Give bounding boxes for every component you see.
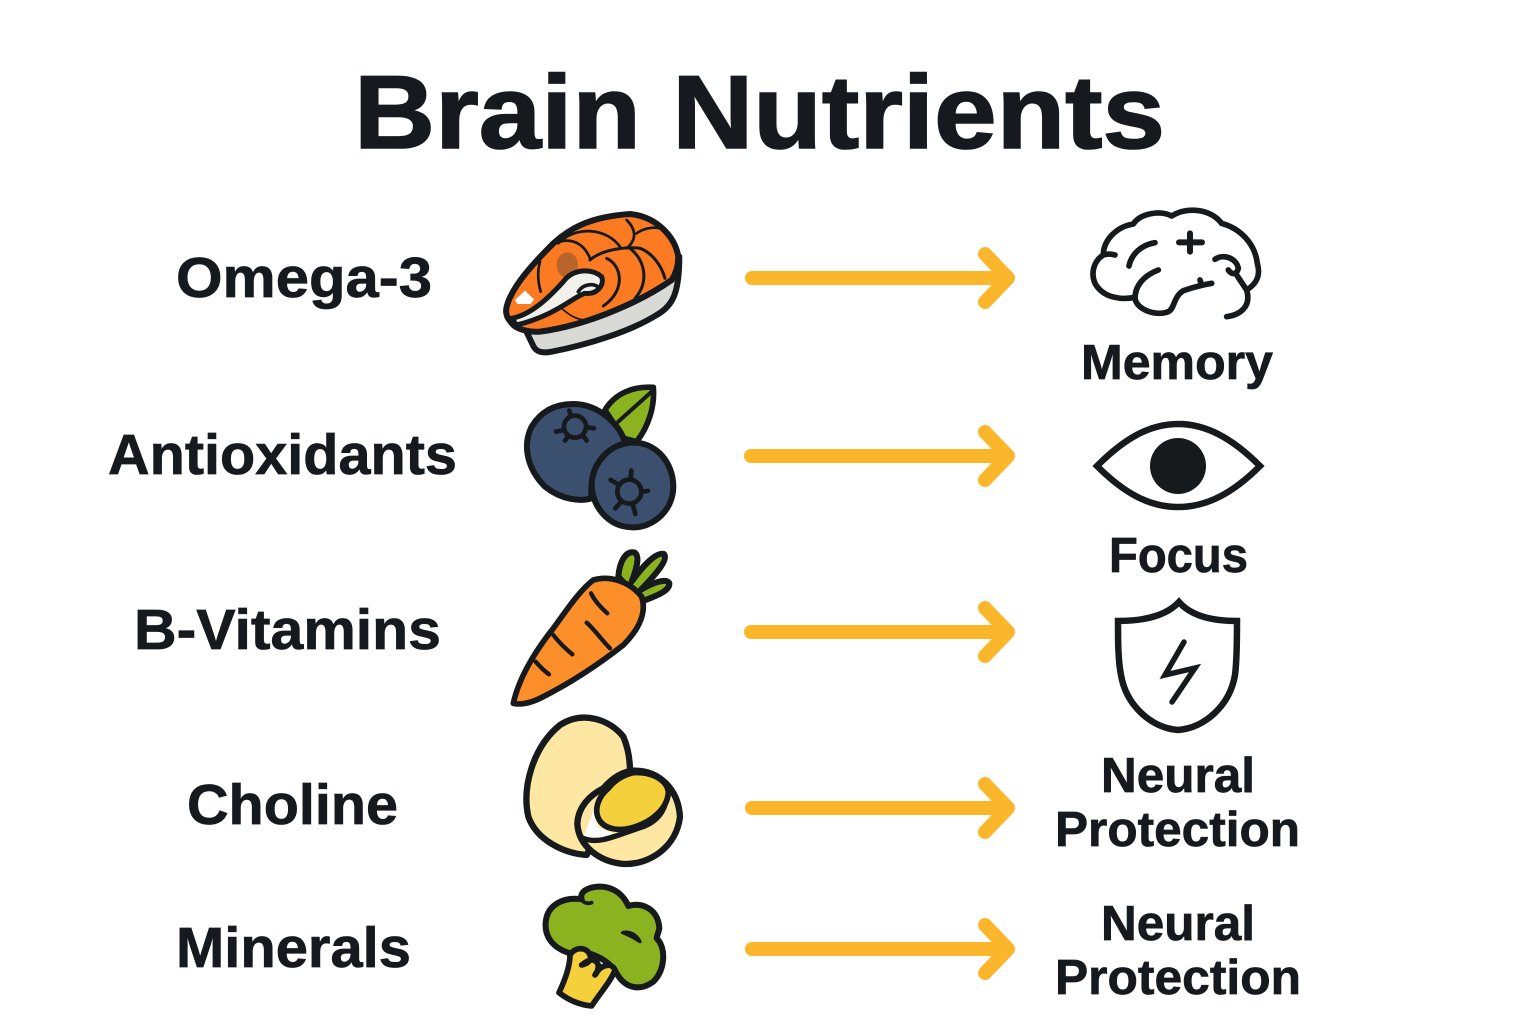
label: Neural Protection (second): Protection — [1055, 951, 1301, 1005]
row: Minerals — [176, 887, 1301, 1006]
label: Omega-3: Omega-3 — [176, 246, 432, 310]
arrow: B-Vitamins to Neural Protection — [751, 608, 1008, 656]
label: Neural Protection (second): Neural — [1101, 897, 1255, 951]
icon: egg — [526, 718, 680, 864]
arrow: Antioxidants to Focus — [751, 432, 1008, 480]
label: Antioxidants: Antioxidants — [108, 423, 457, 487]
arrow: Omega-3 to Memory — [752, 254, 1008, 302]
row: Omega-3 — [176, 210, 1273, 390]
icon: carrot — [513, 552, 669, 704]
title: Brain Nutrients — [354, 55, 1165, 171]
row: Choline — [187, 718, 1300, 864]
icon: blueberries — [527, 387, 673, 527]
label: Choline: Choline — [187, 773, 398, 837]
label: Memory: Memory — [1081, 336, 1273, 390]
arrow: Minerals to Neural Protection — [752, 925, 1008, 973]
label: Neural Protection — [1055, 749, 1300, 857]
label: Minerals: Minerals — [176, 916, 411, 980]
icon: brain — [1093, 210, 1259, 317]
icon: broccoli — [546, 887, 663, 1006]
icon: shield with lightning bolt — [1118, 602, 1237, 730]
row: B-Vitamins — [134, 552, 1237, 730]
label: Focus: Focus — [1109, 529, 1248, 583]
arrow: Choline to Neural Protection — [752, 784, 1008, 832]
label: B-Vitamins: B-Vitamins — [134, 598, 441, 662]
label: Neural Protection (second) — [1055, 897, 1301, 1005]
label: Neural Protection: Neural — [1101, 749, 1255, 803]
label: Neural Protection: Protection — [1055, 803, 1300, 857]
icon: salmon steak — [506, 214, 679, 352]
row: Antioxidants — [108, 387, 1260, 583]
icon: eye — [1097, 424, 1260, 507]
